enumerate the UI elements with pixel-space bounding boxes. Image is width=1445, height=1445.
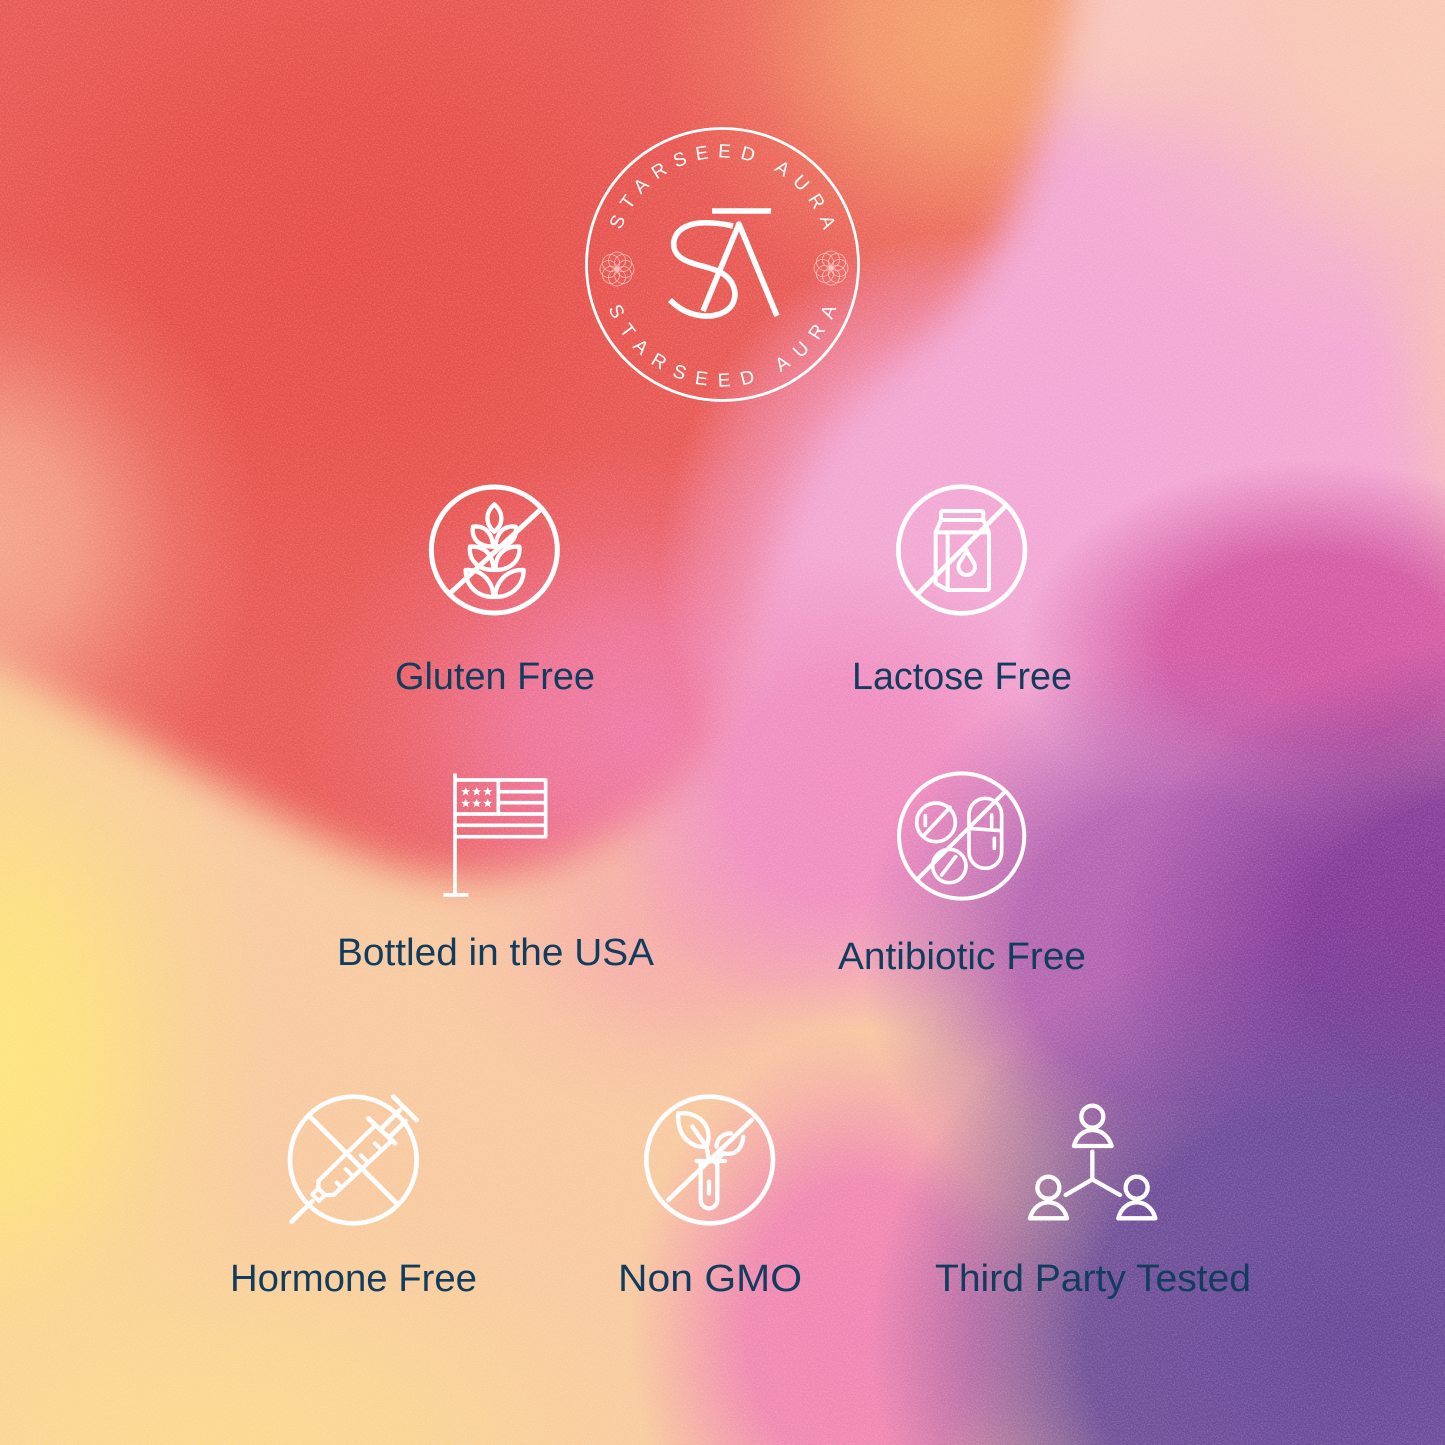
SA monogram: [670, 211, 777, 316]
icon: american flag: [443, 773, 546, 895]
logo left rosette: [599, 251, 635, 287]
icon: three connected people: [1030, 1106, 1155, 1218]
hormone free item: [230, 1097, 477, 1300]
icon: plant in test tube crossed out: [646, 1097, 773, 1223]
logo badge: [585, 127, 860, 402]
antibiotic free item: [838, 773, 1086, 978]
icon: syringe crossed out: [290, 1097, 417, 1223]
label: Third Party Tested: [935, 1258, 1251, 1300]
logo top ring text: STARSEED AURA: [610, 144, 834, 230]
non gmo item: [618, 1097, 802, 1300]
icon: wheat crossed out: [431, 487, 557, 613]
logo right rosette: [813, 250, 849, 286]
icon: pills crossed out: [899, 773, 1024, 899]
icon: milk carton crossed out: [898, 487, 1025, 613]
label: Bottled in the USA: [337, 932, 655, 974]
lactose free item: [852, 487, 1072, 698]
third party tested item: [935, 1106, 1251, 1300]
label: Gluten Free: [395, 656, 595, 698]
bottled in the usa item: [337, 773, 655, 974]
label: Non GMO: [618, 1258, 802, 1300]
logo bottom ring text: STARSEED AURA: [610, 305, 836, 387]
gluten free item: [395, 487, 595, 698]
label: Hormone Free: [230, 1258, 477, 1300]
label: Antibiotic Free: [838, 936, 1086, 978]
label: Lactose Free: [852, 656, 1072, 698]
